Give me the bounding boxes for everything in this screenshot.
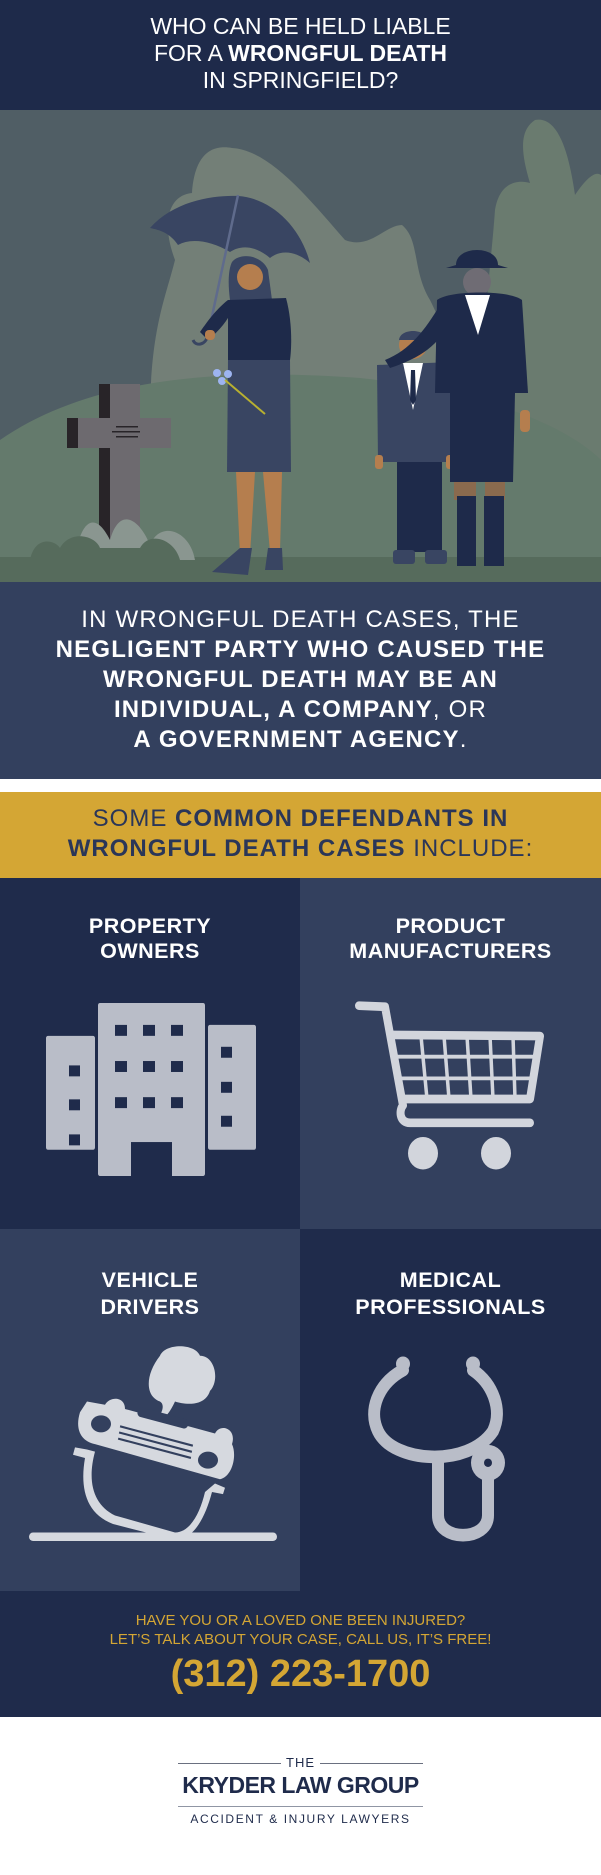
heading: property owners [89, 914, 211, 963]
panel: intro statement [0, 582, 601, 779]
header: title: IN SPRINGFIELD? [203, 67, 398, 93]
banner: common defendants heading [0, 792, 601, 878]
panel: intro statement: NEGLIGENT PARTY WHO CAUSED THE [56, 636, 545, 663]
text: cta lines: LET’S TALK ABOUT YOUR CASE, CALL US, IT’S FREE! [110, 1631, 491, 1648]
logo: kryder law group: ACCIDENT & INJURY LAWYERS [190, 1812, 411, 1826]
heading: medical professionals: MEDICAL [400, 1268, 501, 1292]
header: title [0, 0, 601, 110]
icon: cross gravestone [30, 384, 195, 560]
header: title: FOR A WRONGFUL DEATH [154, 40, 447, 66]
panel: call to action [0, 1591, 601, 1717]
heading: vehicle drivers [100, 1268, 200, 1319]
heading: product manufacturers: MANUFACTURERS [349, 939, 552, 963]
panel: intro statement: A GOVERNMENT AGENCY. [133, 726, 468, 753]
banner: common defendants heading: SOME COMMON DEFENDANTS IN [93, 805, 508, 832]
heading: medical professionals: PROFESSIONALS [355, 1295, 546, 1319]
logo: kryder law group: THE [286, 1755, 315, 1770]
panel: product manufacturers [300, 878, 601, 1229]
text: phone number: (312) 223-1700 [171, 1653, 430, 1695]
panel: intro statement: IN WRONGFUL DEATH CASES, THE [81, 606, 520, 633]
heading: property owners: PROPERTY [89, 914, 211, 938]
panel: medical professionals [300, 1229, 601, 1591]
illustration: mourners at grave [0, 110, 601, 582]
heading: vehicle drivers: DRIVERS [100, 1295, 200, 1319]
banner: common defendants heading: WRONGFUL DEATH CASES INCLUDE: [68, 835, 533, 862]
panel: intro statement: WRONGFUL DEATH MAY BE AN [103, 666, 498, 693]
heading: property owners: OWNERS [100, 939, 200, 963]
panel: vehicle drivers [0, 1229, 300, 1591]
panel: property owners [0, 878, 300, 1229]
icon: stethoscope [368, 1356, 505, 1542]
text: cta lines: HAVE YOU OR A LOVED ONE BEEN INJURED? [136, 1612, 465, 1629]
icon: overturned car [29, 1346, 277, 1541]
logo: kryder law group: KRYDER LAW GROUP [182, 1772, 419, 1798]
heading: vehicle drivers: VEHICLE [102, 1268, 198, 1292]
text: cta lines [110, 1612, 491, 1648]
icon: shopping cart [355, 1001, 544, 1170]
figure: child in suit [375, 331, 455, 564]
header: title: WHO CAN BE HELD LIABLE [150, 13, 451, 39]
figure: woman with umbrella [150, 195, 310, 575]
figure: older woman with hat [385, 250, 530, 566]
panel: intro statement: INDIVIDUAL, A COMPANY, OR [114, 696, 487, 723]
logo: kryder law group [178, 1755, 423, 1826]
heading: product manufacturers [349, 914, 552, 963]
heading: medical professionals [355, 1268, 546, 1319]
heading: product manufacturers: PRODUCT [396, 914, 505, 938]
icon: buildings [46, 1003, 256, 1176]
